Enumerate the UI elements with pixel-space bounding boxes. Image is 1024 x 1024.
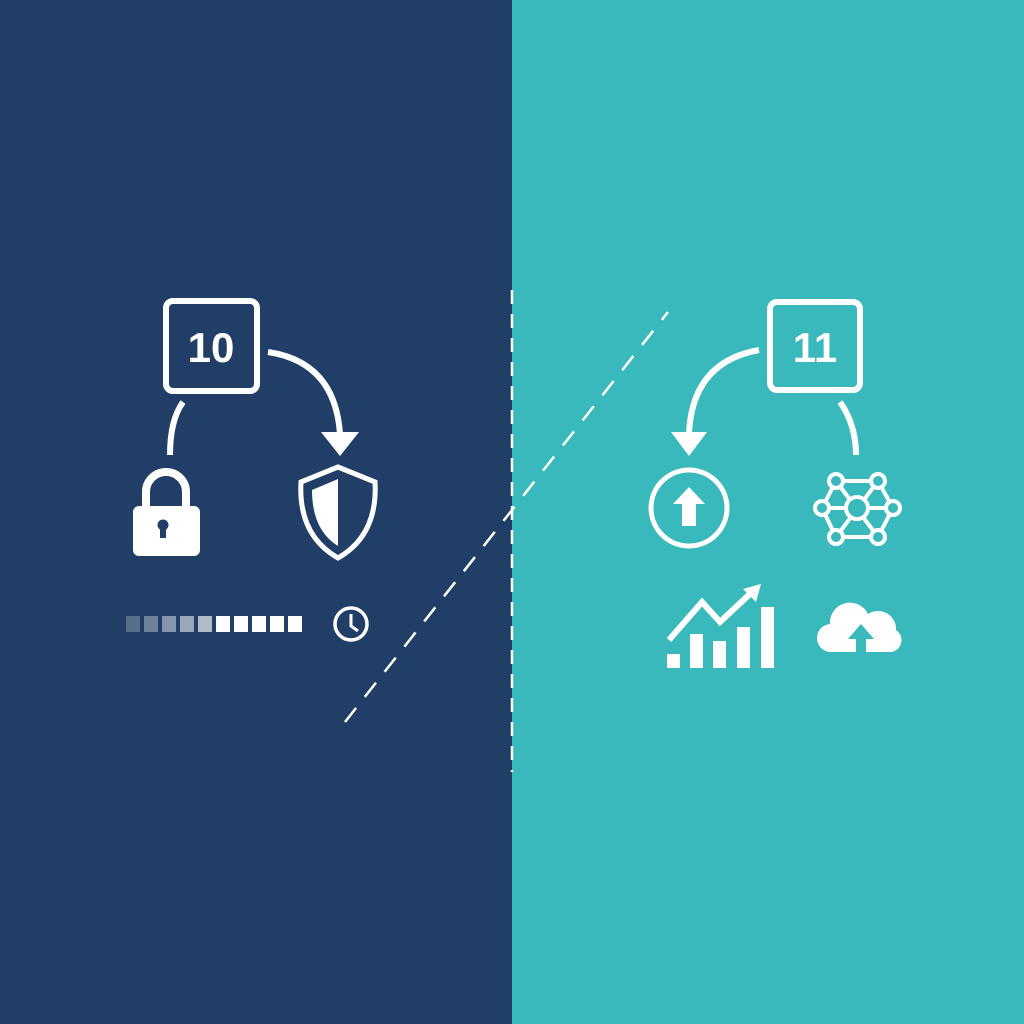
icon: growth chart [667,584,774,668]
progress bar [126,616,302,632]
icon: network [815,474,900,544]
icon: lock [133,472,200,556]
icon: shield [301,467,375,558]
badge: 11: 11 [793,324,837,371]
icon: upload circle [651,470,727,546]
left panel background [0,0,512,1024]
arc: 10 to lock [170,402,183,455]
arc: 11 to network [840,402,856,455]
vertical dashed divider [511,290,513,772]
right panel background [512,0,1024,1024]
icon: clock [335,608,367,640]
badge: 10: 10 [188,324,234,371]
icon: cloud upload [817,603,902,652]
badge: 11 [770,302,860,390]
arrow: 11 to upload [671,350,759,456]
diagonal dashed divider [345,312,668,722]
badge: 10 [166,301,257,391]
arrow: 10 to shield [268,352,359,456]
